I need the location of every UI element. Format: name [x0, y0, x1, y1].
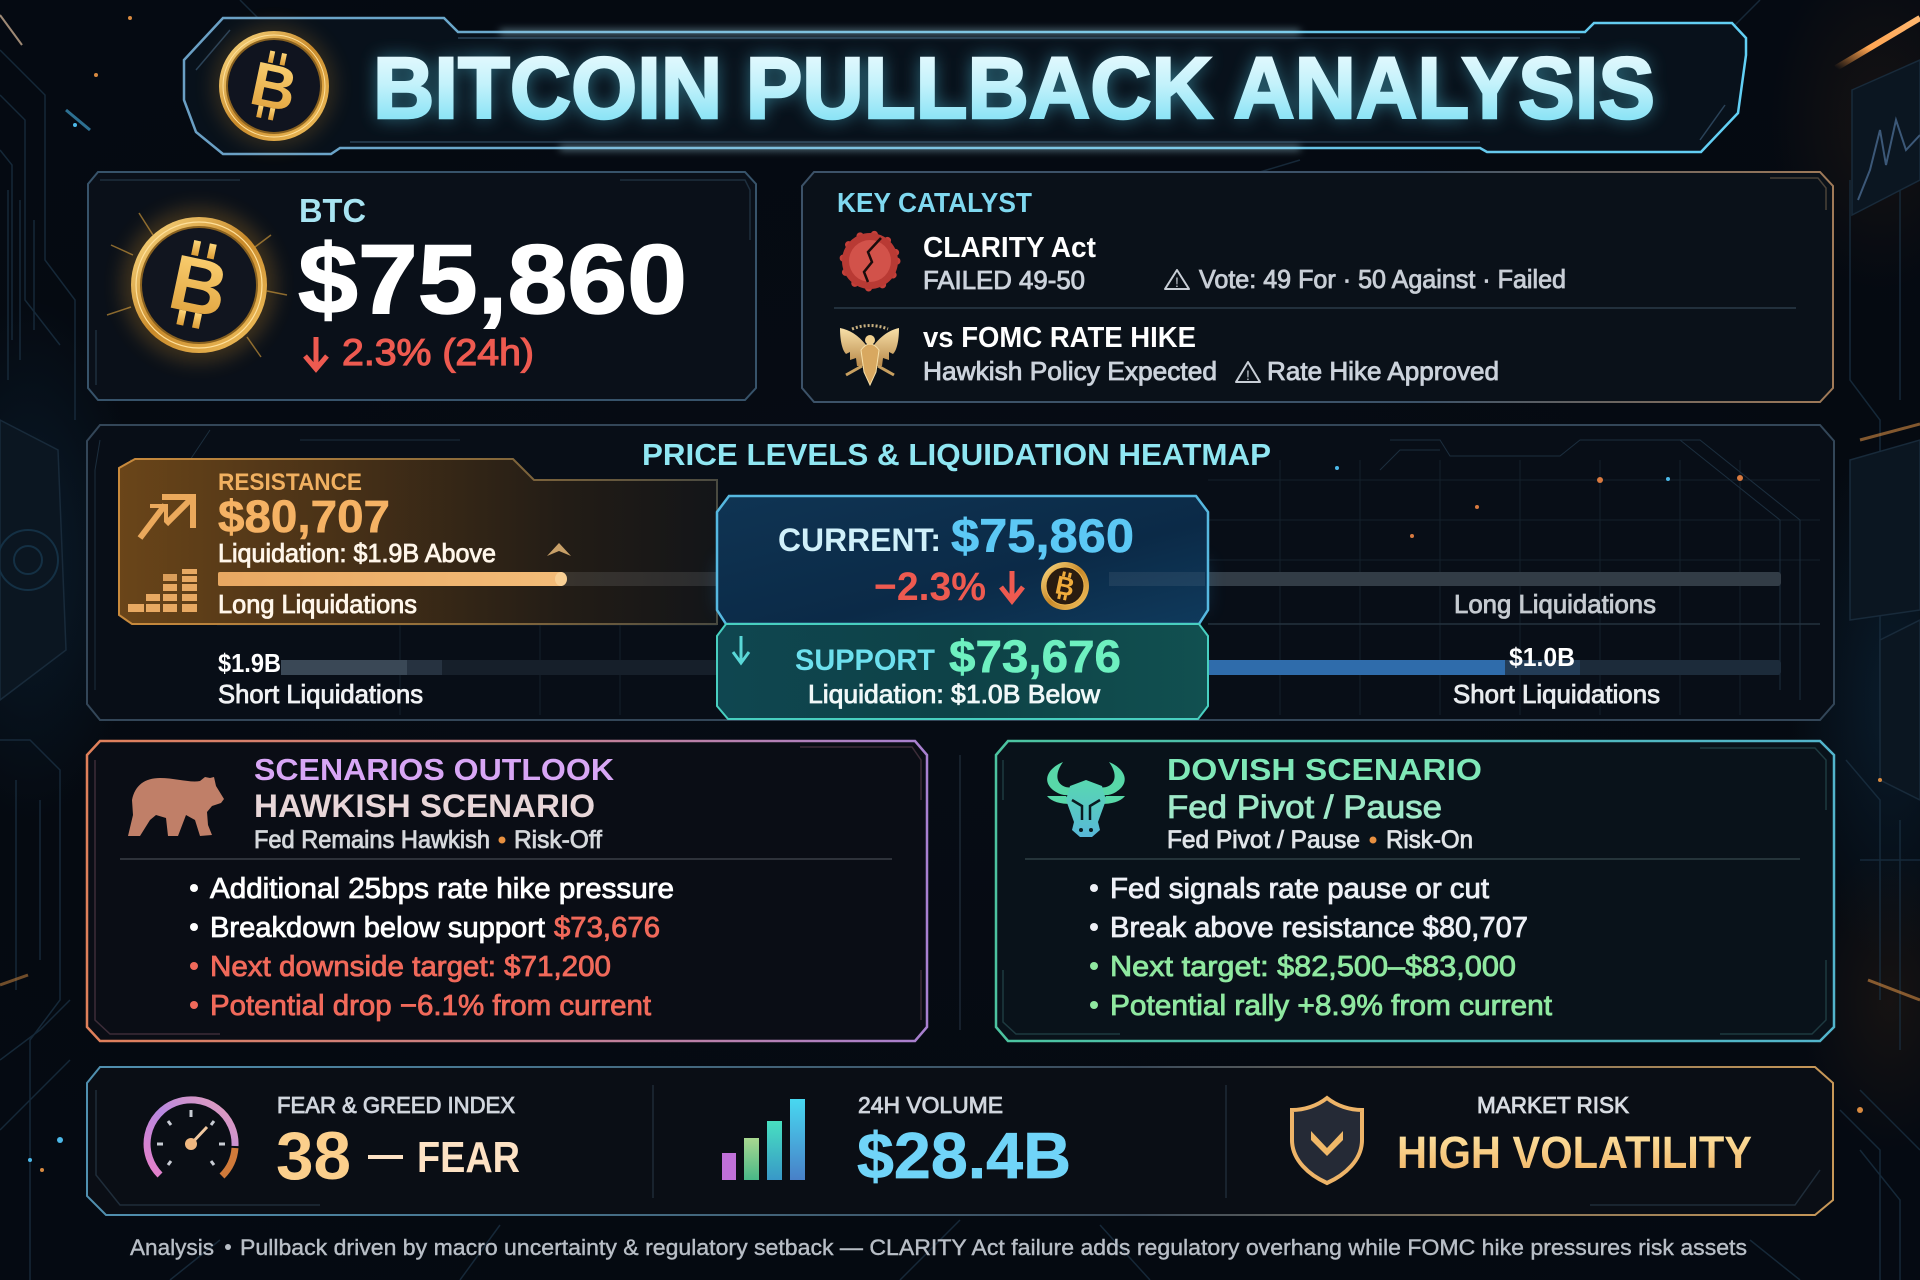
icon: bear: [128, 777, 224, 836]
icon: fear and greed gauge: [147, 1100, 235, 1176]
icon: bitcoin coin (title): B: [245, 49, 303, 126]
panel: market metrics: [87, 1067, 1833, 1215]
title banner: [184, 18, 1746, 154]
resistance price: $80,707: [218, 491, 390, 542]
icon: volume bars: [722, 1099, 805, 1180]
metric value: high volatility: HIGH VOLATILITY: [1397, 1127, 1752, 1178]
vote note: Vote: 49 For · 50 Against · Failed: [1199, 264, 1566, 294]
sub-panel: support: [717, 624, 1208, 719]
panel: dovish scenario: [996, 741, 1834, 1041]
item: CLARITY Act: CLARITY Act: [923, 232, 1096, 264]
icon: warning triangle: !: [1246, 367, 1250, 383]
item: CLARITY Act: [923, 232, 1096, 295]
subtitle: dovish: Risk-On: [1386, 826, 1473, 854]
short value right: $1.0B: [1509, 642, 1575, 672]
current change: −2.3%: [874, 565, 986, 609]
support price: $73,676: [949, 631, 1121, 682]
panel: price levels and liquidation heatmap: [87, 425, 1834, 720]
bullet list: hawkish: Breakdown below support: [210, 912, 545, 944]
bullet list: hawkish: Additional 25bps rate hike pressure: [210, 873, 674, 905]
icon: bitcoin coin (title): [212, 24, 336, 148]
subtitle: dovish: [1167, 826, 1473, 854]
item: CLARITY Act: FAILED 49-50: [923, 265, 1085, 295]
subtitle: hawkish: Risk-Off: [514, 826, 602, 854]
footer analysis note: Analysis: [130, 1235, 214, 1260]
dash: [368, 1155, 403, 1159]
bullet list: hawkish: Next downside target: $71,200: [210, 951, 611, 983]
icon: FOMC eagle: [840, 326, 899, 385]
price value: $75,860: [298, 224, 687, 334]
title text: BITCOIN PULLBACK ANALYSIS: [373, 40, 1655, 137]
bullet list: dovish: Break above resistance $80,707: [1110, 912, 1528, 944]
footer analysis note: Pullback driven by macro uncertainty & regulatory setback — CLARITY Act failure adds regulatory overhang while FOMC hike pressures risk assets: [240, 1235, 1747, 1260]
icon: bitcoin coin small: B: [1053, 569, 1077, 603]
support liquidation: Liquidation: $1.0B Below: [808, 679, 1100, 709]
short liquidation bar right: [1208, 660, 1781, 675]
metric label: volume: 24H VOLUME: [858, 1092, 1003, 1118]
short value left: $1.9B: [218, 648, 281, 678]
current label: CURRENT:: [778, 522, 941, 558]
panel: BTC price: [88, 172, 756, 400]
subtitle: hawkish: Fed Remains Hawkish: [254, 826, 490, 854]
sub-panel: current price: [717, 496, 1208, 624]
heading: hawkish scenario: HAWKISH SCENARIO: [254, 788, 595, 824]
rate hike note: Rate Hike Approved: [1267, 356, 1499, 386]
label: BTC: BTC: [299, 192, 366, 229]
icon: bitcoin coin (price): [107, 207, 287, 363]
bullet list: hawkish: Potential drop −6.1% from current: [210, 990, 651, 1022]
sub-panel: resistance: [119, 459, 717, 624]
resistance label: RESISTANCE: [218, 469, 362, 496]
title text: BITCOIN PULLBACK ANALYSIS: [373, 40, 1655, 137]
icon: bitcoin coin small: [1041, 562, 1089, 610]
metric value: fear: FEAR: [417, 1133, 520, 1182]
metric value: volume: $28.4B: [857, 1119, 1071, 1192]
heading: key catalyst: KEY CATALYST: [837, 187, 1032, 218]
icon: trend arrow up: [140, 497, 193, 538]
bullet list: dovish: Next target: $82,500–$83,000: [1110, 951, 1516, 983]
icon: liquidation bars: [128, 569, 197, 612]
bullet list: hawkish: $73,676: [554, 912, 660, 944]
support label: SUPPORT: [795, 644, 935, 677]
item: FOMC rate hike: Hawkish Policy Expected: [923, 356, 1217, 386]
heading: scenarios outlook: SCENARIOS OUTLOOK: [254, 752, 615, 787]
bullet list: dovish: Fed signals rate pause or cut: [1110, 873, 1489, 905]
icon: down arrow: [305, 337, 327, 369]
current price: $75,860: [951, 509, 1134, 562]
short liquidation bar left: [281, 660, 717, 675]
icon: chevron up: [547, 543, 571, 556]
subtitle: dovish: Fed Pivot / Pause: [1167, 826, 1360, 854]
long liquidation bar: [218, 572, 717, 586]
panel: hawkish scenario: [87, 741, 927, 1041]
icon: down arrow: [733, 636, 749, 663]
panel: key catalyst: [802, 172, 1833, 402]
long liquidations label right: Long Liquidations: [1454, 589, 1656, 619]
resistance liquidation: Liquidation: $1.9B Above: [218, 538, 496, 568]
icon: warning triangle: [1165, 270, 1189, 290]
heading: fed pivot: Fed Pivot / Pause: [1167, 789, 1442, 825]
metric label: fear and greed: FEAR & GREED INDEX: [277, 1092, 515, 1118]
heading: dovish scenario: DOVISH SCENARIO: [1167, 752, 1482, 787]
item: FOMC rate hike: [923, 322, 1217, 386]
price change: 2.3% (24h): [342, 332, 534, 373]
heading: heatmap: PRICE LEVELS & LIQUIDATION HEATMAP: [642, 437, 1271, 472]
icon: bitcoin coin (price): B: [162, 237, 235, 335]
icon: risk shield: [1292, 1098, 1362, 1183]
icon: red down arrow: [1001, 571, 1023, 601]
icon: warning triangle: [1236, 362, 1260, 383]
long liquidation bar right: [1109, 572, 1781, 586]
icon: broken wax seal: [842, 233, 898, 289]
icon: bull: [1047, 762, 1125, 837]
metric value: 38: 38: [276, 1118, 351, 1194]
bullet list: dovish: [1090, 873, 1552, 1022]
item: FOMC rate hike: vs FOMC RATE HIKE: [923, 322, 1196, 354]
long liquidations label: Long Liquidations: [218, 589, 417, 619]
short liquidations label left: Short Liquidations: [218, 679, 423, 709]
bullet list: hawkish: [190, 873, 674, 1022]
bullet list: dovish: Potential rally +8.9% from current: [1110, 990, 1552, 1022]
icon: warning triangle: !: [1175, 274, 1179, 290]
short liquidations label right: Short Liquidations: [1453, 679, 1660, 709]
metric label: market risk: MARKET RISK: [1477, 1092, 1630, 1118]
